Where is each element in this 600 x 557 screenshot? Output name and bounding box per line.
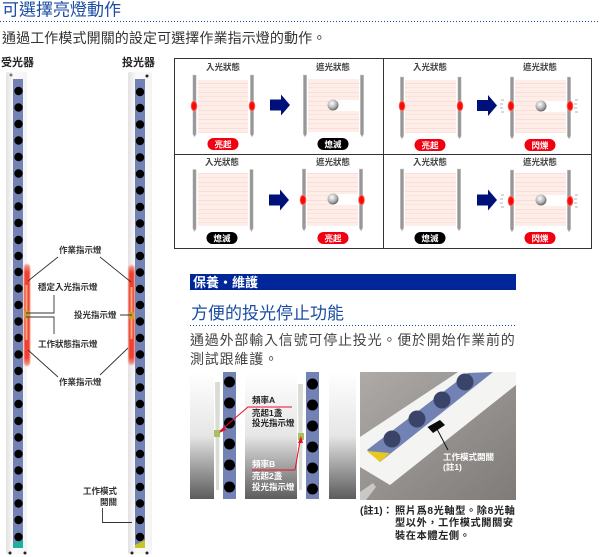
footnote: (註1)： <box>360 504 393 517</box>
cell: off then flashing: 熄滅 <box>421 234 439 244</box>
photo: emitter indicator frequencies: 投光指示燈 <box>252 418 295 428</box>
section description: 測試跟維護。 <box>190 351 279 367</box>
footnote: 裝在本體左側。 <box>395 529 471 542</box>
cell: on then off: 入光狀態 <box>206 62 240 72</box>
cell: on then flashing: 入光狀態 <box>413 62 447 72</box>
indicator callouts <box>26 245 132 387</box>
photo: emitter indicator frequencies: 投光指示燈 <box>252 482 295 492</box>
footnote: 型以外，工作模式開關安 <box>395 516 514 529</box>
receiver indicator glow <box>24 264 30 366</box>
cell: on then flashing: 閃爍 <box>531 140 549 150</box>
cell: off then flashing <box>400 157 578 244</box>
cell: on then off: 熄滅 <box>324 140 342 150</box>
cell: on then off: 亮起 <box>214 140 232 150</box>
indicator callouts: 作業指示燈 <box>59 377 102 387</box>
indicator callouts: 投光指示燈 <box>74 310 117 320</box>
photo: emitter indicator frequencies <box>190 372 356 499</box>
cell: off then on <box>193 157 365 244</box>
cell: off then flashing: 閃爍 <box>531 234 549 244</box>
panel: indicator action table <box>174 58 592 248</box>
cell: off then on: 亮起 <box>324 234 342 244</box>
photo: emitter indicator frequencies: 亮起2盞 <box>252 471 283 481</box>
cell: on then flashing <box>399 62 578 151</box>
indicator callouts: 工作狀態指示燈 <box>38 339 98 349</box>
section banner: 保養・維護 <box>193 275 258 290</box>
cell: off then flashing: 遮光狀態 <box>523 157 557 167</box>
section heading: 方便的投光停止功能 <box>191 304 344 323</box>
work mode switch callout: 工作模式 <box>83 486 118 496</box>
cell: on then off: 遮光狀態 <box>316 62 350 72</box>
cell: on then flashing: 亮起 <box>421 140 439 150</box>
subtitle text: 通過工作模式開關的設定可選擇作業指示燈的動作。 <box>2 30 326 46</box>
photo: emitter indicator frequencies: 頻率A <box>252 395 275 405</box>
receiver label: 受光器 <box>1 55 34 69</box>
indicator callouts: 作業指示燈 <box>59 245 102 255</box>
photo: work mode switch close-up: (註1) <box>443 462 462 472</box>
photo: work mode switch close-up: 工作模式開關 <box>443 452 494 462</box>
footnote <box>360 504 515 542</box>
emitter label: 投光器 <box>122 55 155 69</box>
emitter bar <box>128 72 152 554</box>
cell: off then on: 熄滅 <box>213 234 231 244</box>
cell: on then flashing: 遮光狀態 <box>523 62 557 72</box>
section description <box>190 332 516 367</box>
footnote: 照片爲8光軸型。除8光軸 <box>395 504 515 517</box>
cell: off then on: 入光狀態 <box>205 157 239 167</box>
cell: off then flashing: 入光狀態 <box>413 157 447 167</box>
work mode switch callout: 開關 <box>100 497 117 507</box>
title: 可選擇亮燈動作 <box>2 0 121 20</box>
receiver bar <box>6 72 27 554</box>
photo: emitter indicator frequencies: 頻率B <box>252 459 275 469</box>
work mode switch callout <box>83 486 132 522</box>
section description: 通過外部輸入信號可停止投光。便於開始作業前的 <box>190 332 516 348</box>
photo: emitter indicator frequencies: 亮起1盞 <box>252 408 283 418</box>
indicator callouts: 穩定入光指示燈 <box>38 282 98 292</box>
cell: off then on: 遮光狀態 <box>316 157 350 167</box>
emitter indicator glow <box>128 265 134 365</box>
section banner <box>190 274 516 290</box>
cell: on then off <box>191 62 364 150</box>
photo: work mode switch close-up <box>360 372 516 500</box>
